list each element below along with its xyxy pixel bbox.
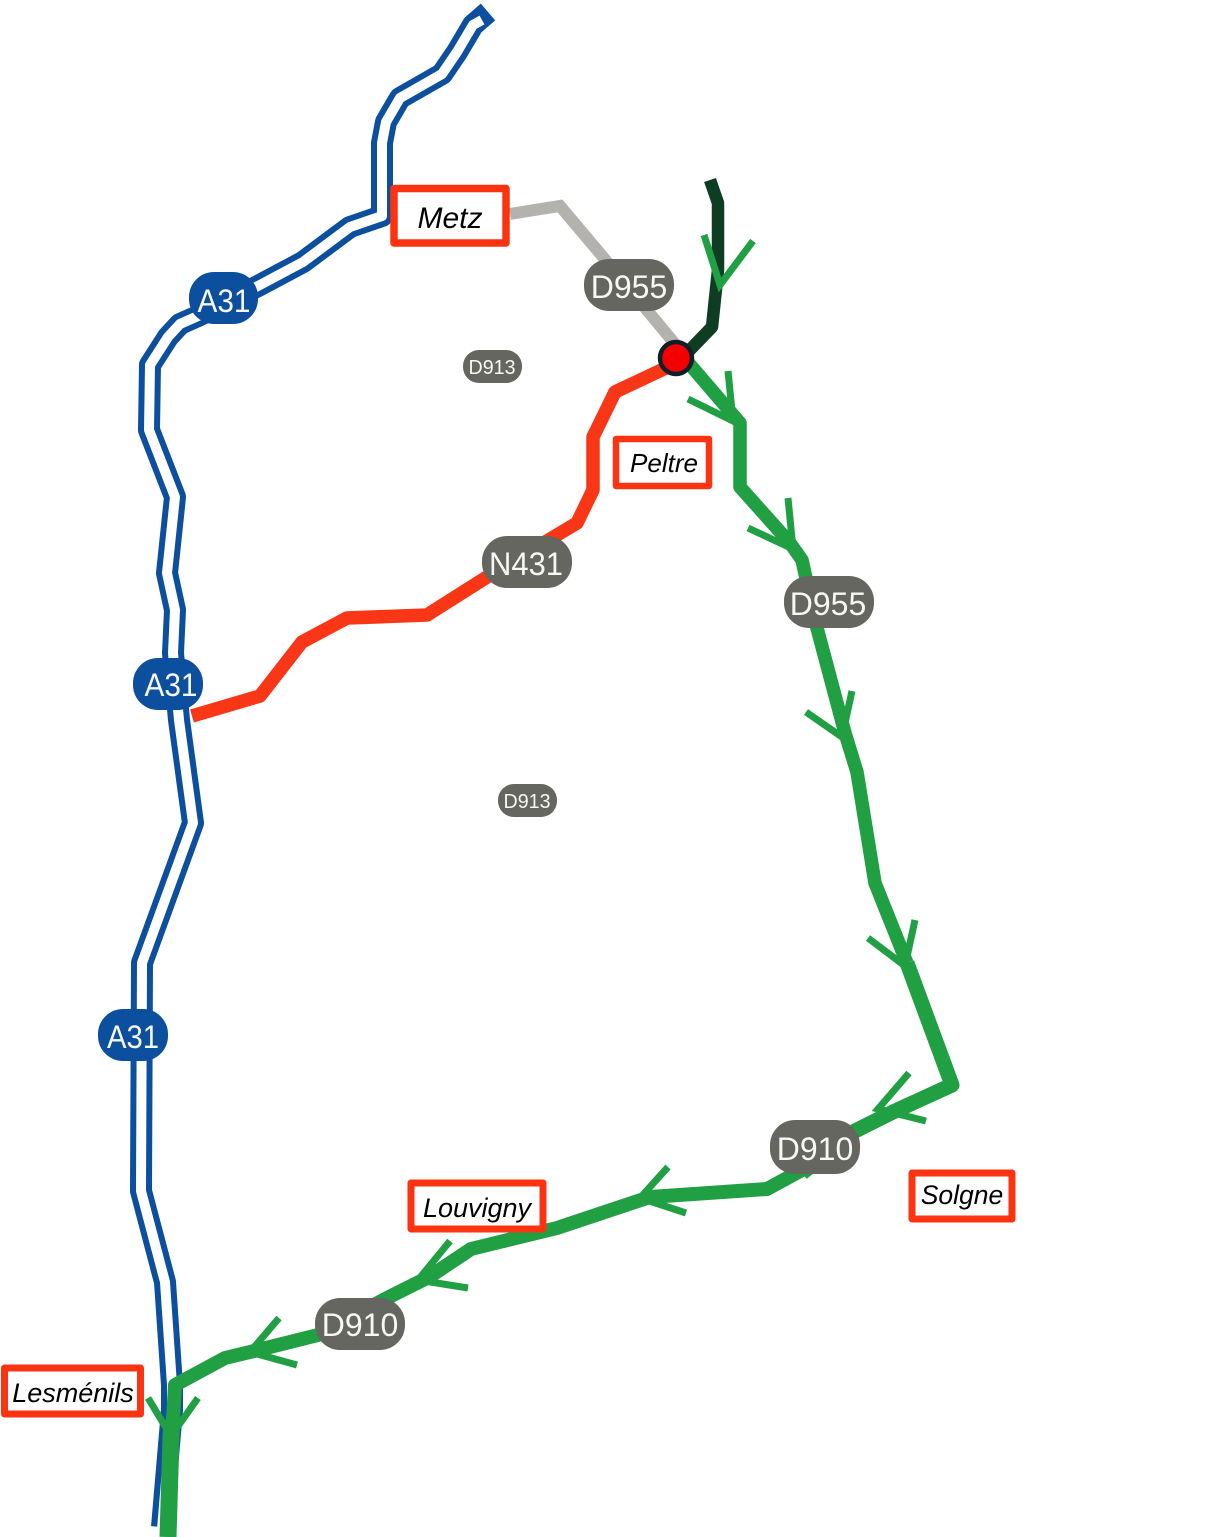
badge: D910 left xyxy=(315,1298,405,1350)
road: green route xyxy=(168,360,952,1537)
badge: D913 upper xyxy=(463,350,522,383)
badge: D913 lower: D913 xyxy=(504,791,550,813)
label: Solgne: Solgne xyxy=(921,1180,1003,1210)
road: red N431 xyxy=(192,367,668,716)
label: Louvigny xyxy=(411,1183,543,1229)
badge: A31 middle xyxy=(133,658,203,710)
badge: D955 top: D955 xyxy=(591,269,667,305)
road: grey D955 to Metz xyxy=(510,206,680,350)
badge: N431 xyxy=(482,536,572,588)
badge: D910 right xyxy=(770,1120,860,1174)
road: dark green spur xyxy=(684,180,718,356)
green segment: lower right xyxy=(802,963,952,1173)
label: Lesménils: Lesménils xyxy=(12,1378,134,1408)
badge: A31 top: A31 xyxy=(198,283,250,319)
label: Lesménils xyxy=(4,1368,140,1414)
road badges xyxy=(98,259,874,1350)
badge: A31 bottom xyxy=(98,1009,168,1061)
label: Peltre: Peltre xyxy=(630,448,698,478)
place labels xyxy=(4,188,1012,1414)
badge: A31 top xyxy=(189,272,258,324)
label: Peltre xyxy=(616,439,709,486)
green segment: bottom xyxy=(172,1170,802,1437)
green segment: upper xyxy=(686,360,907,963)
label: Metz xyxy=(394,188,506,243)
junction marker xyxy=(660,342,692,374)
green segment: final stretch xyxy=(168,1420,172,1537)
badge: D955 lower: D955 xyxy=(790,586,866,622)
label: Solgne xyxy=(912,1173,1012,1219)
label: Metz: Metz xyxy=(417,202,483,235)
arrowheads xyxy=(148,235,926,1436)
badge: D913 upper: D913 xyxy=(468,357,516,379)
badge: D913 lower xyxy=(498,784,557,817)
badge: N431: N431 xyxy=(489,546,563,582)
label: Louvigny: Louvigny xyxy=(423,1193,533,1223)
road: A31 motorway xyxy=(141,12,488,1529)
badge: D955 top xyxy=(584,259,674,311)
badge: D910 left: D910 xyxy=(322,1307,398,1343)
badge: A31 bottom: A31 xyxy=(107,1019,159,1055)
badge: D955 lower xyxy=(784,576,874,628)
badge: A31 middle: A31 xyxy=(144,667,198,703)
badge: D910 right: D910 xyxy=(777,1131,853,1167)
